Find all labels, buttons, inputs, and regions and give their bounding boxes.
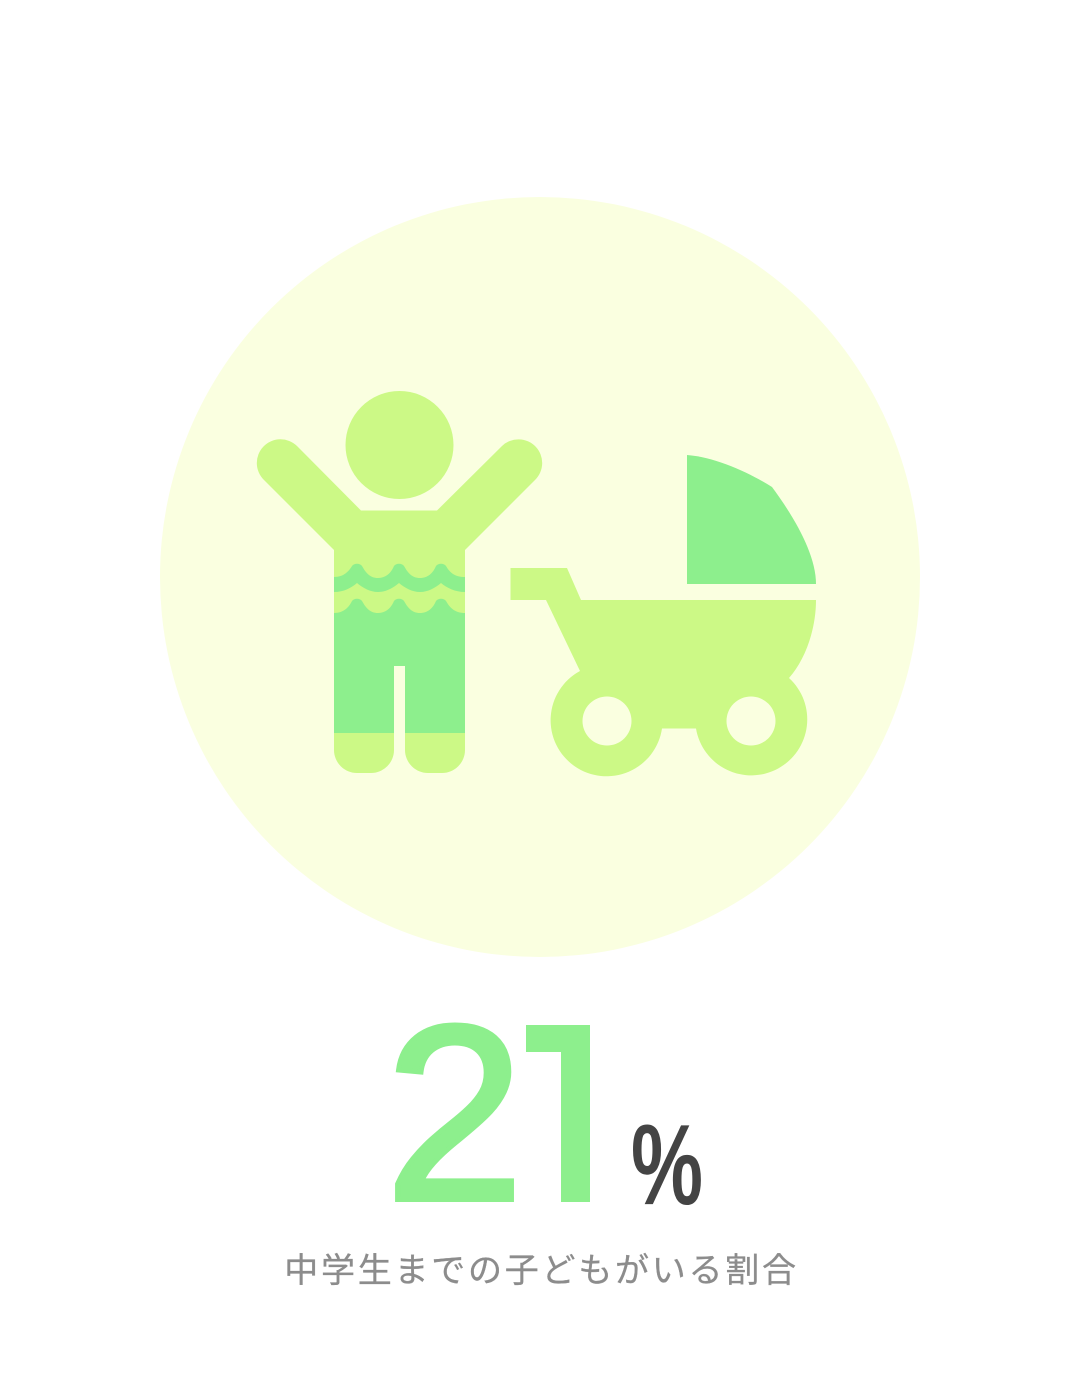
digit 1: 1 (496, 968, 642, 1261)
infographic (160, 197, 920, 1286)
child trousers (334, 599, 465, 733)
percent sign: % (631, 1102, 703, 1229)
caption: 中学生までの子どもがいる割合 (284, 1252, 799, 1290)
icon: child with raised arms (257, 391, 542, 773)
digit 2: 2 (385, 974, 524, 1252)
left wheel hub (582, 696, 632, 746)
stroller frame and wheels (510, 568, 816, 776)
child body and arms (257, 439, 542, 773)
digit 1 flag (526, 1025, 562, 1052)
icon: baby stroller (510, 455, 816, 776)
child clothing (334, 564, 465, 592)
stroller canopy (687, 455, 816, 584)
percentage value (395, 1022, 590, 1202)
background circle (160, 197, 920, 957)
right wheel hub (726, 696, 776, 746)
child head (346, 391, 454, 499)
